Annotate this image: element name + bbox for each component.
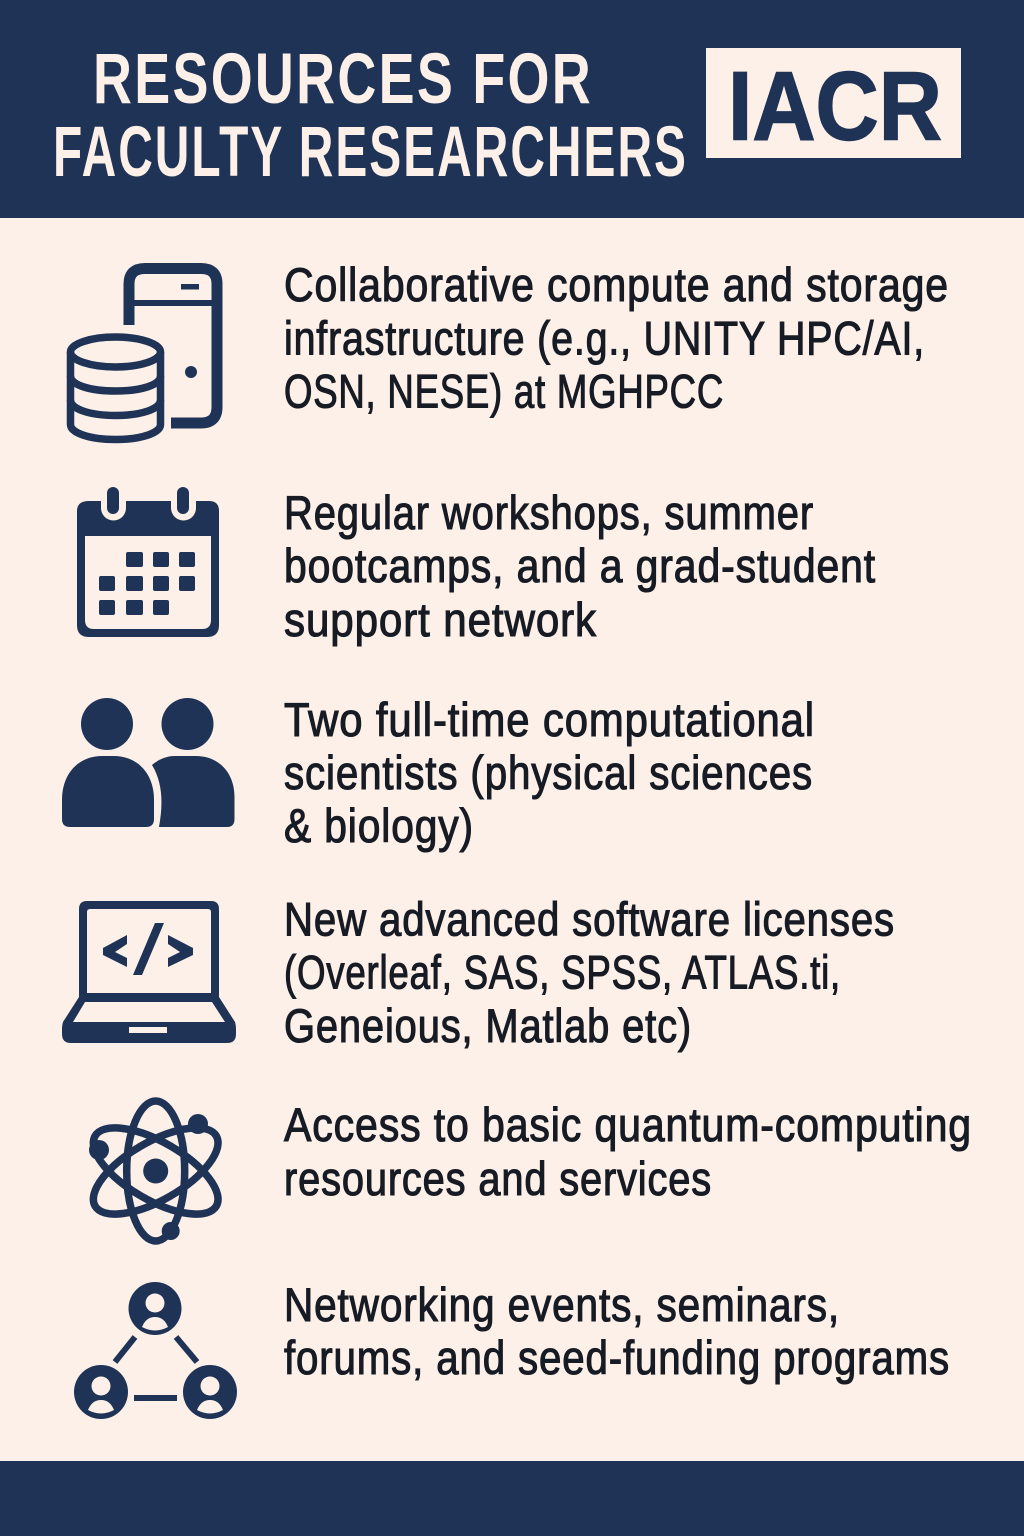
header band bbox=[0, 0, 1024, 218]
text: software licenses: New advanced software licenses bbox=[284, 892, 895, 946]
text: computational scientists: scientists (physical sciences bbox=[284, 746, 813, 799]
text: workshops and bootcamps: support network bbox=[284, 593, 597, 646]
text: software licenses: Geneious, Matlab etc) bbox=[284, 999, 692, 1052]
title bbox=[53, 40, 688, 192]
text: quantum computing: resources and services bbox=[284, 1152, 712, 1205]
title: FACULTY RESEARCHERS bbox=[53, 113, 688, 192]
text: quantum computing bbox=[284, 1098, 972, 1205]
text: networking and seed funding: Networking events, seminars, bbox=[284, 1278, 840, 1331]
text: workshops and bootcamps bbox=[284, 486, 876, 646]
logo: IACR: IACR bbox=[728, 52, 942, 160]
text: software licenses: (Overleaf, SAS, SPSS, ATLAS.ti, bbox=[284, 946, 841, 998]
text: networking and seed funding bbox=[284, 1278, 950, 1384]
footer band bbox=[0, 1461, 1024, 1536]
icon: atom bbox=[81, 1101, 231, 1241]
icon: calendar bbox=[77, 487, 219, 637]
title: RESOURCES FOR bbox=[93, 40, 593, 119]
text: compute and storage bbox=[284, 258, 949, 418]
icon: two people bbox=[62, 698, 234, 827]
text: workshops and bootcamps: bootcamps, and a grad-student bbox=[284, 539, 876, 592]
icon: server and database bbox=[70, 268, 217, 440]
text: compute and storage: OSN, NESE) at MGHPCC bbox=[284, 364, 724, 418]
text: computational scientists: Two full-time computational bbox=[284, 693, 815, 746]
text: software licenses bbox=[284, 892, 895, 1052]
icon: laptop with code bbox=[62, 901, 236, 1043]
text: compute and storage: Collaborative compute and storage bbox=[284, 258, 949, 311]
text: computational scientists bbox=[284, 693, 815, 852]
icon: network of people bbox=[74, 1282, 237, 1419]
text: computational scientists: & biology) bbox=[284, 799, 474, 852]
text: workshops and bootcamps: Regular workshops, summer bbox=[284, 486, 814, 539]
